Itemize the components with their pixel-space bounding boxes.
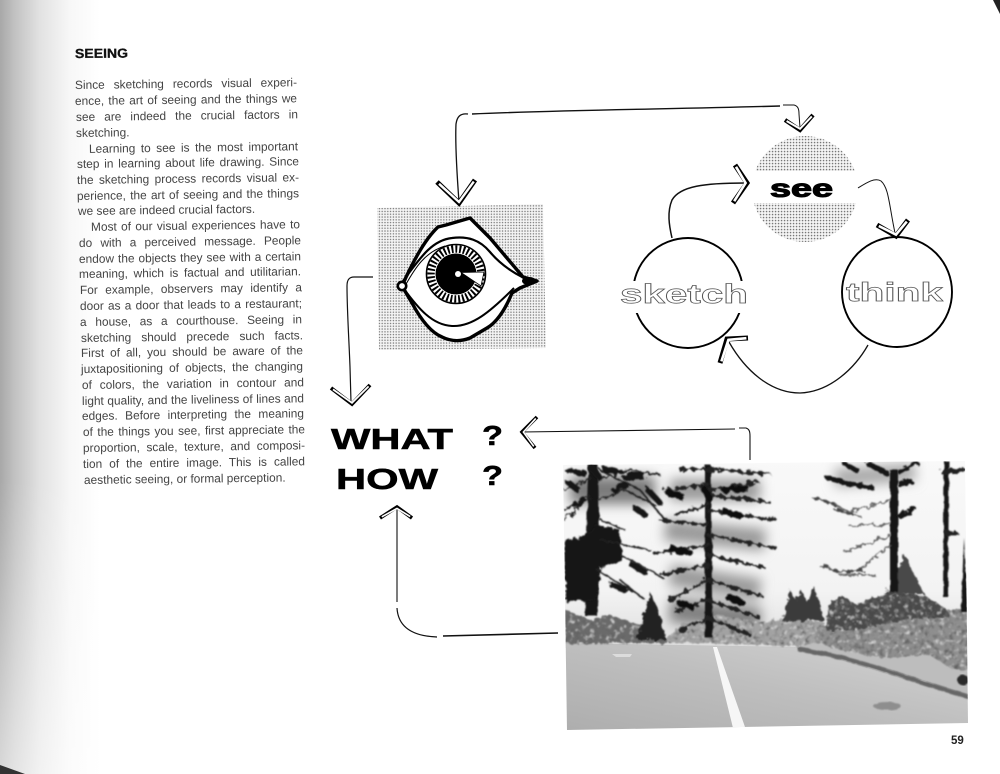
text block: body copy: proportion, scale, texture, and composi- — [83, 438, 305, 455]
text block: body copy: light quality, and the liveliness of lines and — [82, 391, 304, 408]
label: think: think — [846, 277, 944, 307]
conifer behind trunk — [885, 555, 924, 595]
text block: body copy: of the things you see, first appreciate the — [83, 422, 305, 439]
text block: body copy: Most of our visual experiences have to — [91, 217, 300, 234]
text block: body copy: Learning to see is the most important — [89, 139, 298, 156]
tree trunks — [585, 461, 968, 638]
foliage haze — [570, 472, 915, 620]
arrow: see to think — [858, 180, 908, 236]
upper right bushes — [826, 592, 950, 630]
tree foliage right — [812, 463, 963, 575]
road center line — [713, 647, 745, 728]
text block: body copy: edges. Before interpreting the meaning — [82, 406, 304, 423]
text block: body copy: sketching. — [76, 125, 130, 140]
text block: body copy: endow the objects they see with a certain — [79, 249, 301, 266]
text block: body copy: step in learning about life drawing. Since — [77, 154, 299, 171]
text block: body copy: For example, observers may identify a — [79, 280, 302, 297]
photo: road and trees — [560, 458, 972, 732]
label: sketch: sketch — [620, 279, 748, 309]
text block: body copy: door as a door that leads to a restaurant; — [80, 296, 302, 313]
tree foliage centre — [655, 469, 775, 635]
label: see: see — [770, 175, 833, 203]
text: question mark what: ? — [482, 420, 503, 451]
panel: see circle — [752, 136, 858, 242]
panel: think circle — [842, 237, 952, 347]
small distant trees — [782, 586, 824, 622]
icon: eye outline — [402, 218, 537, 341]
text block: body copy: juxtapositioning of objects, the changing — [81, 359, 303, 376]
arrow: sketch to see — [669, 165, 747, 238]
distant mid bushes — [665, 615, 826, 646]
verge — [800, 640, 970, 696]
text block: body copy — [75, 75, 305, 487]
road — [560, 643, 970, 732]
heading: SEEING — [75, 46, 128, 61]
stone — [957, 675, 969, 685]
page number: 59 — [951, 735, 964, 747]
curb — [798, 649, 970, 697]
arrow: eye to WHAT — [331, 277, 373, 404]
left ground bushes — [565, 610, 672, 644]
oil stain — [873, 702, 901, 710]
text block: body copy: Since sketching records visual experi- — [75, 75, 297, 92]
text block: body copy: a house, as a courthouse. Seeing in — [80, 312, 302, 329]
icon: eyelid lines — [403, 238, 524, 326]
text block: body copy: ence, the art of seeing and the things we — [75, 91, 297, 108]
arrow: think to sketch — [720, 338, 868, 393]
text: WHAT: WHAT — [331, 424, 453, 456]
arrow: top line to see — [472, 105, 813, 130]
text: question mark how: ? — [482, 460, 503, 491]
text block: body copy: do with a perceived message. People — [78, 233, 301, 250]
text block: body copy: see are indeed the crucial factors in — [76, 107, 298, 124]
text block: body copy: aesthetic seeing, or formal perception. — [84, 471, 285, 487]
arrow: top line to eye — [437, 114, 475, 203]
road arrow mark — [612, 654, 632, 657]
text block: body copy: of colors, the variation in contour and — [82, 375, 304, 392]
text block: body copy: we see are indeed crucial factors. — [78, 202, 255, 218]
text block: body copy: sketching should precede such facts. — [81, 328, 303, 345]
text block: body copy: perience, the art of seeing and the things — [77, 186, 299, 203]
small tree left of centre — [637, 592, 666, 640]
tree foliage left — [565, 466, 665, 602]
text block: body copy: meaning, which is factual and utilitarian. — [79, 264, 301, 281]
icon: iris — [426, 244, 486, 304]
lower right bushes — [815, 608, 970, 672]
arrow: photo to HOW — [380, 507, 558, 637]
text block: body copy: First of all, you should be aware of the — [81, 343, 303, 360]
arrow: photo to WHAT — [522, 417, 750, 460]
icon: inner corner — [398, 282, 406, 290]
text block: body copy: tion of the entire image. This is called — [83, 454, 305, 471]
panel: sketch circle — [620, 238, 748, 348]
panel: eye illustration — [377, 204, 546, 350]
icon: outer corner — [522, 277, 536, 285]
text block: body copy: the sketching process records visual ex- — [77, 170, 299, 187]
text: HOW: HOW — [336, 464, 439, 496]
